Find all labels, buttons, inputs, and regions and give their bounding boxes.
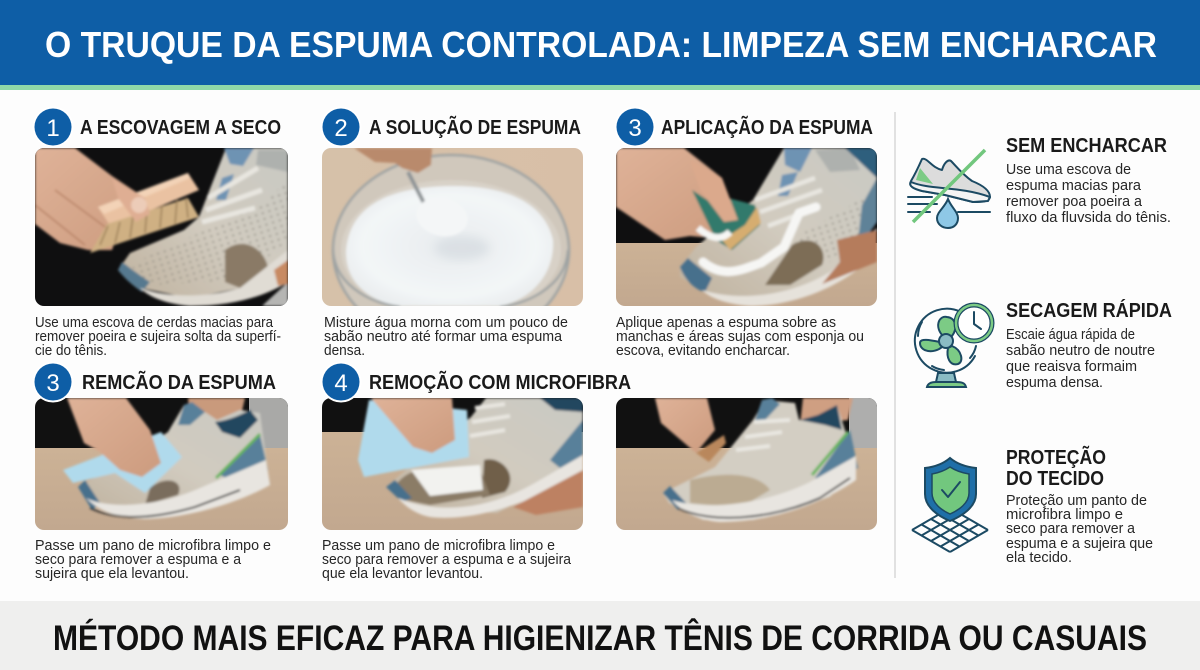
step 1 description: remover poeira e sujeira solta da superfí- bbox=[35, 329, 281, 345]
benefit: sem encharcar bbox=[908, 135, 1171, 228]
step 5 photo bbox=[322, 398, 583, 530]
step 4 panel: foam removal bbox=[32, 362, 288, 582]
step 4 number badge: 3 bbox=[46, 370, 60, 397]
step 1 photo: dry brushing bbox=[35, 148, 288, 306]
vertical divider bbox=[894, 112, 896, 578]
step 4 description: sujeira que ela levantou. bbox=[35, 566, 189, 582]
step 3 number badge bbox=[614, 106, 656, 148]
step 2 number badge bbox=[320, 106, 362, 148]
step 1 description: cie do tênis. bbox=[35, 343, 107, 359]
icon: crossed shoe with water drop bbox=[908, 150, 990, 228]
step 5 number badge: 4 bbox=[334, 370, 348, 397]
step 2 description bbox=[324, 315, 568, 359]
step 3 description: escova, evitando encharcar. bbox=[616, 343, 790, 359]
step 3 heading: APLICAÇÃO DA ESPUMA bbox=[661, 116, 873, 139]
step 5 heading: REMOÇÃO COM MICROFIBRA bbox=[369, 371, 631, 394]
description: espuma e a sujeira que bbox=[1006, 536, 1153, 552]
step 5 description: Passe um pano de microfibra limpo e bbox=[322, 538, 555, 554]
step 3 description bbox=[616, 315, 864, 359]
icon: fan with clock bbox=[915, 305, 992, 387]
description bbox=[1006, 327, 1155, 391]
step 2 panel bbox=[320, 106, 583, 359]
step 2 description: sabão neutro até formar uma espuma bbox=[324, 329, 563, 345]
step 2 description: densa. bbox=[324, 343, 365, 359]
description: sabão neutro de noutre bbox=[1006, 343, 1155, 359]
step 1 panel bbox=[32, 106, 288, 359]
step 4 description bbox=[35, 538, 271, 582]
step 5 number badge bbox=[320, 362, 362, 402]
step 5 description: seco para remover a espuma e a sujeira bbox=[322, 552, 572, 568]
description: ela tecido. bbox=[1006, 550, 1072, 566]
description bbox=[1006, 493, 1153, 566]
description: remover poa poeira a bbox=[1006, 194, 1143, 210]
step 5 description bbox=[322, 538, 572, 582]
step 3 photo: applying foam bbox=[616, 148, 877, 306]
description: Escaie água rápida de bbox=[1006, 327, 1135, 343]
benefit: secagem rapida bbox=[915, 299, 1172, 391]
step 3 number badge: 3 bbox=[628, 115, 642, 142]
step 5 panel: microfiber removal bbox=[320, 362, 631, 582]
step 3 panel bbox=[614, 106, 877, 359]
step 4 heading: REMCÃO DA ESPUMA bbox=[82, 371, 276, 394]
benefit: protecao do tecido bbox=[912, 446, 1153, 566]
step 3 description: Aplique apenas a espuma sobre as bbox=[616, 315, 836, 331]
heading: SEM ENCHARCAR bbox=[1006, 135, 1167, 157]
description: espuma macias para bbox=[1006, 178, 1142, 194]
footer banner bbox=[0, 601, 1200, 670]
title: O TRUQUE DA ESPUMA CONTROLADA: LIMPEZA SEM ENCHARCAR bbox=[45, 24, 1157, 65]
step 2 number badge: 2 bbox=[334, 115, 348, 142]
description bbox=[1006, 162, 1171, 226]
step 1 description bbox=[35, 315, 281, 359]
heading bbox=[1006, 446, 1106, 490]
step 4 number badge bbox=[32, 362, 74, 402]
step 4 description: Passe um pano de microfibra limpo e bbox=[35, 538, 271, 554]
description: Use uma escova de bbox=[1006, 162, 1131, 178]
step 6 photo: clean shoe result bbox=[616, 398, 877, 530]
icon: shield over fabric mesh bbox=[912, 458, 988, 552]
header banner bbox=[0, 0, 1200, 90]
step 1 heading: A ESCOVAGEM A SECO bbox=[80, 117, 281, 139]
step 2 heading: A SOLUÇÃO DE ESPUMA bbox=[369, 116, 581, 139]
heading: PROTEÇÃO bbox=[1006, 446, 1106, 469]
step 3 description: manchas e áreas sujas com esponja ou bbox=[616, 329, 864, 345]
step 4 description: seco para remover a espuma e a bbox=[35, 552, 242, 568]
step 4 photo bbox=[35, 398, 288, 530]
description: Proteção um panto de bbox=[1006, 493, 1147, 509]
description: seco para remover a bbox=[1006, 521, 1136, 537]
step 1 number badge: 1 bbox=[46, 115, 60, 142]
description: que reaisva formaim bbox=[1006, 359, 1137, 375]
heading: SECAGEM RÁPIDA bbox=[1006, 299, 1172, 322]
description: microfibra limpo e bbox=[1006, 507, 1123, 523]
step 2 description: Misture água morna com um pouco de bbox=[324, 315, 568, 331]
description: fluxo da fluvsida do tênis. bbox=[1006, 210, 1171, 226]
step 5 description: que ela levantor levantou. bbox=[322, 566, 483, 582]
heading: DO TECIDO bbox=[1006, 468, 1104, 490]
description: espuma densa. bbox=[1006, 375, 1103, 391]
step 2 photo: foam bowl bbox=[322, 148, 583, 306]
step 1 number badge bbox=[32, 106, 74, 148]
step 1 description: Use uma escova de cerdas macias para bbox=[35, 315, 274, 331]
